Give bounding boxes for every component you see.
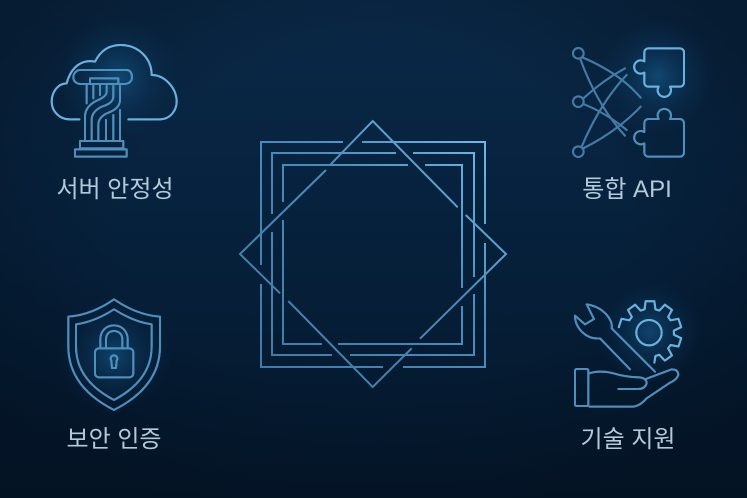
icon: cloud and pillar [52, 45, 177, 157]
icon glow: shield [56, 298, 172, 414]
icon glow: gear [598, 280, 702, 384]
icon: network and puzzle pieces [573, 48, 684, 157]
inner square [283, 165, 462, 344]
outer square [261, 142, 485, 367]
icon glow: cloud [56, 16, 180, 140]
panel: security authentication [56, 298, 172, 453]
label: 통합 API [582, 176, 672, 203]
label: 기술 지원 [580, 426, 676, 453]
icon: wrench, gear and hand [575, 301, 681, 407]
rotated diamond [240, 121, 506, 387]
label: 보안 인증 [66, 426, 162, 453]
panel: technical support [575, 280, 702, 453]
middle square [272, 153, 474, 355]
panel: integration API [573, 18, 716, 203]
icon: shield and lock [68, 299, 160, 410]
icon glow: puzzle [600, 18, 716, 134]
central geometric emblem [240, 121, 506, 387]
panel: server stability [52, 16, 180, 203]
label: 서버 안정성 [56, 176, 174, 203]
